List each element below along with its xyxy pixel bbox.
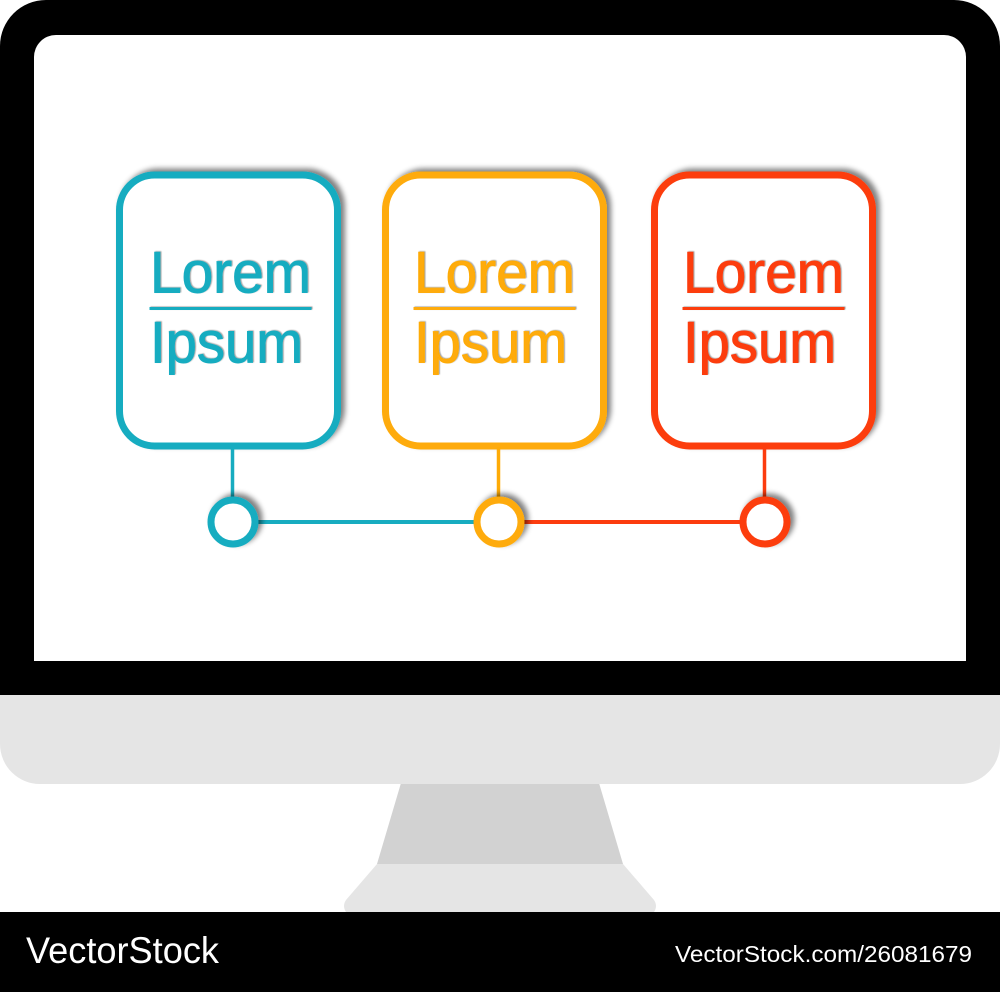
card outline [654, 175, 872, 446]
monitor screen [34, 35, 966, 661]
card text: Lorem [414, 240, 575, 306]
card outline [120, 175, 338, 446]
card text: Ipsum [414, 310, 567, 376]
card text [414, 240, 576, 376]
card text [150, 240, 312, 376]
monitor stand neck [377, 783, 623, 864]
stem [231, 447, 234, 500]
panel: amber card [386, 175, 604, 544]
timeline connector: teal [255, 520, 478, 524]
stem [497, 447, 500, 500]
stem [763, 447, 766, 500]
timeline connector: red [520, 520, 744, 524]
card text: Ipsum [150, 310, 303, 376]
panel: teal card [120, 175, 338, 544]
footer brand: VectorStock [26, 930, 219, 971]
monitor bezel [0, 0, 1000, 695]
node [477, 500, 521, 544]
monitor chin [0, 695, 1000, 784]
card text: Ipsum [683, 310, 836, 376]
footer bar [0, 912, 1000, 992]
panel: red card [654, 175, 872, 544]
node [211, 500, 255, 544]
card outline [386, 175, 604, 446]
card text: Lorem [683, 240, 844, 306]
footer url: VectorStock.com/26081679 [675, 941, 972, 967]
card text [682, 240, 844, 376]
node [743, 500, 787, 544]
monitor stand base [344, 864, 656, 912]
card text: Lorem [150, 240, 311, 306]
